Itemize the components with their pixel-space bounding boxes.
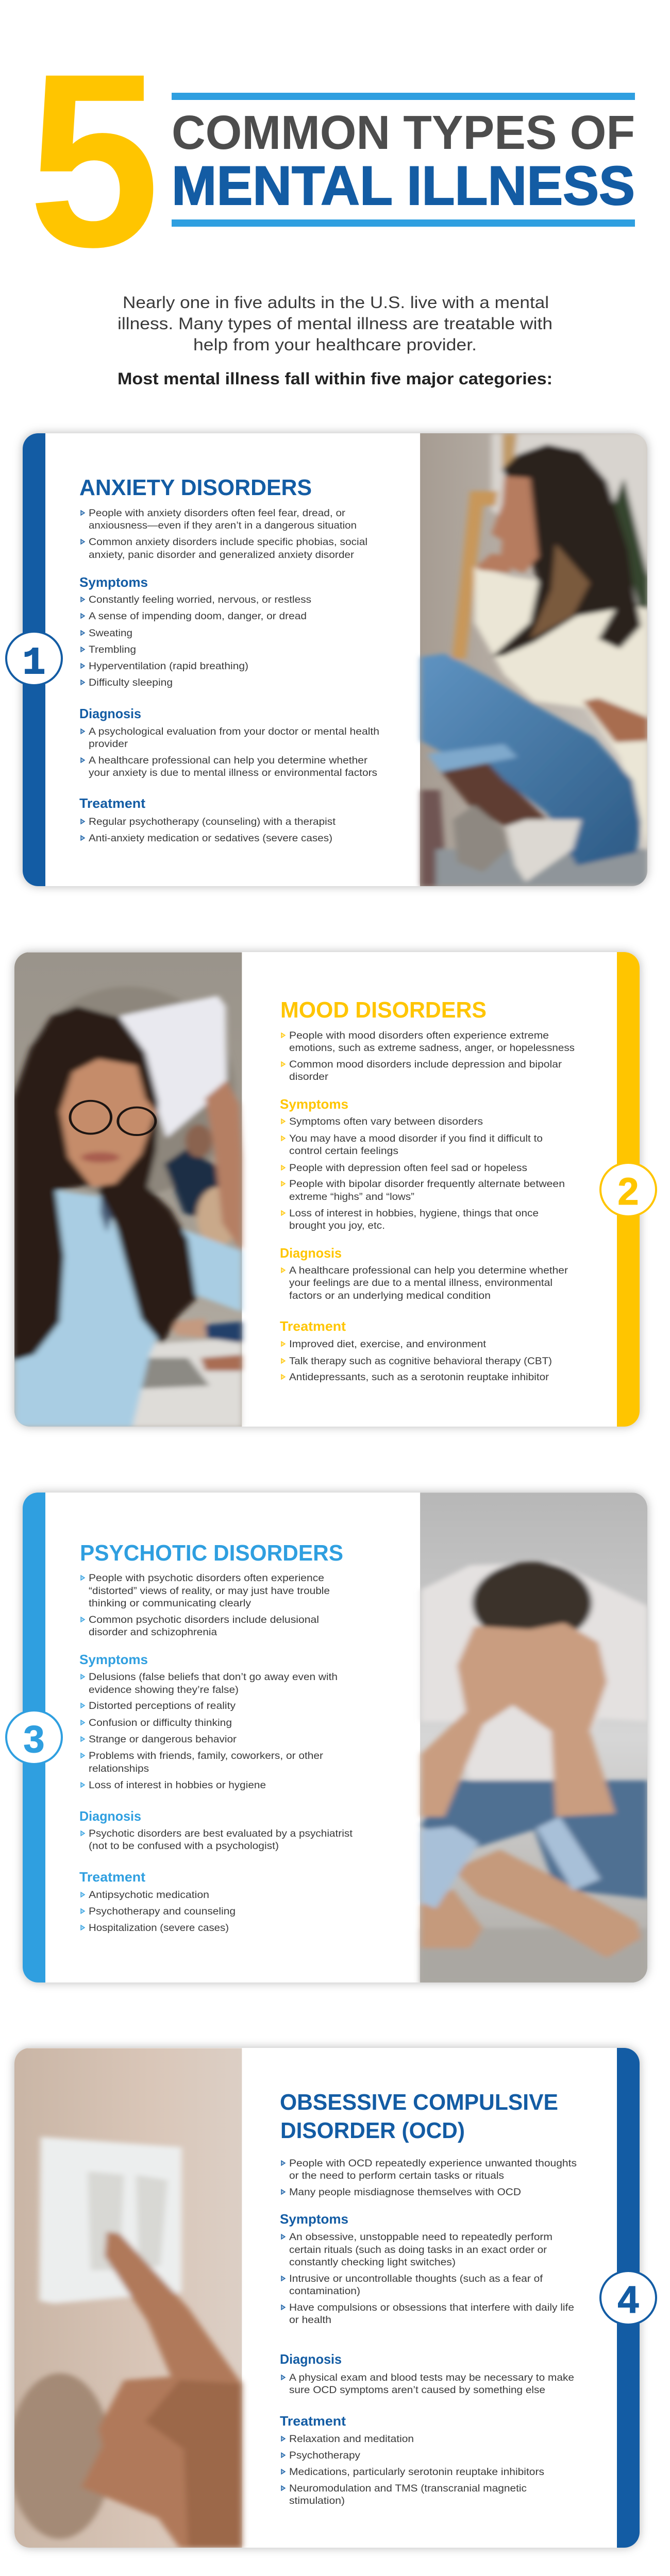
symptoms list: Distorted perceptions of reality xyxy=(89,1700,236,1711)
symptoms list: or health xyxy=(289,2314,331,2326)
symptoms list: brought you joy, etc. xyxy=(289,1220,385,1231)
symptoms list: Strange or dangerous behavior xyxy=(89,1734,237,1745)
panel: anxiety disorders xyxy=(6,433,648,887)
overview text xyxy=(281,1030,575,1379)
overview text: Many people misdiagnose themselves with OCD xyxy=(289,2187,521,2198)
header title xyxy=(28,22,635,298)
diagnosis list: A healthcare professional can help you determine whether xyxy=(289,1265,568,1276)
symptoms list: control certain feelings xyxy=(289,1145,398,1157)
symptoms list: relationships xyxy=(89,1763,149,1774)
symptoms list: An obsessive, unstoppable need to repeatedly perform xyxy=(289,2231,552,2243)
panel: obsessive compulsive disorder xyxy=(9,2048,656,2549)
overview text: People with mood disorders often experience extreme xyxy=(289,1030,549,1041)
number badge 1: 1 xyxy=(23,642,45,685)
overview text: “distorted” views of reality, or may just have trouble xyxy=(89,1585,330,1597)
treatment list: Improved diet, exercise, and environment xyxy=(289,1338,487,1350)
symptoms list: Trembling xyxy=(89,644,136,655)
symptoms list: You may have a mood disorder if you find it difficult to xyxy=(289,1133,543,1144)
overview text xyxy=(81,1572,330,1930)
treatment list: Psychotherapy xyxy=(289,2450,360,2461)
diagnosis list: Diagnosis xyxy=(79,1808,141,1824)
diagnosis list: Diagnosis xyxy=(280,2351,342,2367)
diagnosis list: A healthcare professional can help you determine whether xyxy=(89,755,368,766)
treatment list: Anti-anxiety medication or sedatives (severe cases) xyxy=(89,833,332,844)
diagnosis list: (not to be confused with a psychologist) xyxy=(89,1840,279,1852)
number badge 3 xyxy=(6,1710,62,1764)
diagnosis list: factors or an underlying medical condition xyxy=(289,1290,491,1301)
overview text: People with anxiety disorders often feel fear, dread, or xyxy=(89,507,346,519)
diagnosis list: Psychotic disorders are best evaluated by a psychiatrist xyxy=(89,1828,353,1839)
overview text: People with OCD repeatedly experience unwanted thoughts xyxy=(289,2158,577,2169)
panel: mood disorders xyxy=(13,952,656,1427)
diagnosis list xyxy=(79,706,379,778)
diagnosis list xyxy=(79,1808,353,1852)
treatment list: Hospitalization (severe cases) xyxy=(89,1922,229,1934)
treatment list: Antidepressants, such as a serotonin reuptake inhibitor xyxy=(289,1371,549,1383)
diagnosis list: A psychological evaluation from your doctor or mental health xyxy=(89,726,379,737)
symptoms list: Hyperventilation (rapid breathing) xyxy=(89,660,248,672)
heading: mood disorders: MOOD DISORDERS xyxy=(280,997,487,1023)
symptoms list: Symptoms xyxy=(280,2211,348,2227)
symptoms list: Symptoms xyxy=(79,574,148,590)
treatment list: Neuromodulation and TMS (transcranial magnetic xyxy=(289,2483,527,2494)
photo: frustrated woman with glasses xyxy=(13,952,242,1427)
treatment list: Antipsychotic medication xyxy=(89,1889,209,1901)
diagnosis list: provider xyxy=(89,738,128,750)
overview text: thinking or communicating clearly xyxy=(89,1598,251,1609)
heading: anxiety disorders: ANXIETY DISORDERS xyxy=(79,475,312,500)
heading: obsessive compulsive disorder xyxy=(280,2090,558,2143)
diagnosis list xyxy=(280,1245,568,1301)
overview text: disorder xyxy=(289,1071,329,1082)
title line: mental illness: MENTAL ILLNESS xyxy=(172,155,635,216)
treatment list: Treatment xyxy=(79,1869,145,1885)
number badge 2: 2 xyxy=(617,1170,639,1213)
symptoms list: Loss of interest in hobbies or hygiene xyxy=(89,1780,266,1791)
treatment list: Psychotherapy and counseling xyxy=(89,1906,236,1917)
treatment list: Treatment xyxy=(79,795,145,811)
number badge 4 xyxy=(600,2271,656,2325)
overview text: People with psychotic disorders often experience xyxy=(89,1572,324,1584)
diagnosis list: your feelings are due to a mental illness, environmental xyxy=(289,1277,552,1289)
intro lead-in: Most mental illness fall within five major categories: xyxy=(118,369,552,388)
symptoms list: Symptoms xyxy=(280,1096,348,1112)
big number 5: 5 xyxy=(28,22,160,298)
intro text xyxy=(118,293,552,388)
treatment list xyxy=(79,1869,236,1934)
heading: obsessive compulsive disorder: OBSESSIVE COMPULSIVE xyxy=(280,2090,558,2115)
overview text: anxiousness—even if they aren’t in a dangerous situation xyxy=(89,520,357,531)
overview text xyxy=(81,507,367,840)
title line: common types of: COMMON TYPES OF xyxy=(172,106,635,159)
intro text: illness. Many types of mental illness are treatable with xyxy=(118,314,552,333)
symptoms list: People with depression often feel sad or hopeless xyxy=(289,1162,527,1174)
symptoms list: Delusions (false beliefs that don’t go away even with xyxy=(89,1671,338,1683)
symptoms list: certain rituals (such as doing tasks in an exact order or xyxy=(289,2244,547,2256)
overview text: Common anxiety disorders include specific phobias, social xyxy=(89,536,367,548)
number badge 4: 4 xyxy=(617,2278,639,2321)
diagnosis list: A physical exam and blood tests may be necessary to make xyxy=(289,2372,574,2383)
heading: obsessive compulsive disorder: DISORDER (OCD) xyxy=(280,2118,465,2143)
overview text: or the need to perform certain tasks or rituals xyxy=(289,2170,504,2181)
treatment list: Relaxation and meditation xyxy=(289,2433,414,2445)
treatment list: Talk therapy such as cognitive behavioral therapy (CBT) xyxy=(289,1355,552,1367)
overview text: emotions, such as extreme sadness, anger, or hopelessness xyxy=(289,1042,575,1054)
treatment list: stimulation) xyxy=(289,2495,345,2506)
number badge 3: 3 xyxy=(23,1718,45,1760)
symptoms list: Sweating xyxy=(89,628,132,639)
treatment list xyxy=(79,795,336,844)
symptoms list: Loss of interest in hobbies, hygiene, things that once xyxy=(289,1208,539,1219)
symptoms list: Constantly feeling worried, nervous, or restless xyxy=(89,594,311,605)
symptoms list xyxy=(79,1652,338,1791)
diagnosis list: your anxiety is due to mental illness or environmental factors xyxy=(89,767,377,778)
symptoms list xyxy=(280,2211,574,2326)
symptoms list xyxy=(280,1096,565,1231)
symptoms list: Symptoms often vary between disorders xyxy=(289,1116,483,1127)
intro text: Nearly one in five adults in the U.S. live with a mental xyxy=(123,293,549,312)
symptoms list: Confusion or difficulty thinking xyxy=(89,1717,232,1728)
symptoms list: Problems with friends, family, coworkers, or other xyxy=(89,1750,324,1761)
photo: finger pressing a light switch xyxy=(9,2048,242,2549)
symptoms list: extreme “highs” and “lows” xyxy=(289,1191,414,1202)
overview text: Common psychotic disorders include delusional xyxy=(89,1614,319,1625)
overview text: Common mood disorders include depression and bipolar xyxy=(289,1059,562,1070)
treatment list xyxy=(280,1318,552,1383)
diagnosis list: Diagnosis xyxy=(79,706,141,721)
symptoms list: Symptoms xyxy=(79,1652,148,1667)
treatment list: Medications, particularly serotonin reuptake inhibitors xyxy=(289,2466,544,2478)
diagnosis list xyxy=(280,2351,574,2396)
diagnosis list: sure OCD symptoms aren’t caused by something else xyxy=(289,2384,545,2396)
symptoms list xyxy=(79,574,311,688)
symptoms list: Have compulsions or obsessions that interfere with daily life xyxy=(289,2302,574,2313)
intro text: help from your healthcare provider. xyxy=(193,335,477,354)
symptoms list: constantly checking light switches) xyxy=(289,2257,456,2268)
symptoms list: evidence showing they’re false) xyxy=(89,1684,239,1696)
symptoms list: A sense of impending doom, danger, or dread xyxy=(89,611,307,622)
panel: psychotic disorders xyxy=(6,1493,648,1984)
symptoms list: contamination) xyxy=(289,2285,360,2297)
overview text: anxiety, panic disorder and generalized anxiety disorder xyxy=(89,549,355,561)
photo: woman sitting anxiously xyxy=(420,433,648,887)
treatment list: Treatment xyxy=(280,1318,346,1334)
symptoms list: Intrusive or uncontrollable thoughts (such as a fear of xyxy=(289,2273,543,2284)
diagnosis list: Diagnosis xyxy=(280,1245,342,1261)
heading: psychotic disorders: PSYCHOTIC DISORDERS xyxy=(80,1540,343,1566)
treatment list xyxy=(280,2413,544,2506)
overview text: disorder and schizophrenia xyxy=(89,1626,217,1638)
symptoms list: People with bipolar disorder frequently alternate between xyxy=(289,1178,565,1190)
number badge 1 xyxy=(6,632,62,685)
treatment list: Regular psychotherapy (counseling) with a therapist xyxy=(89,816,336,827)
treatment list: Treatment xyxy=(280,2413,346,2429)
symptoms list: Difficulty sleeping xyxy=(89,677,173,688)
photo: man holding his head xyxy=(420,1493,648,1984)
number badge 2 xyxy=(600,1163,656,1216)
overview text xyxy=(281,2158,577,2490)
